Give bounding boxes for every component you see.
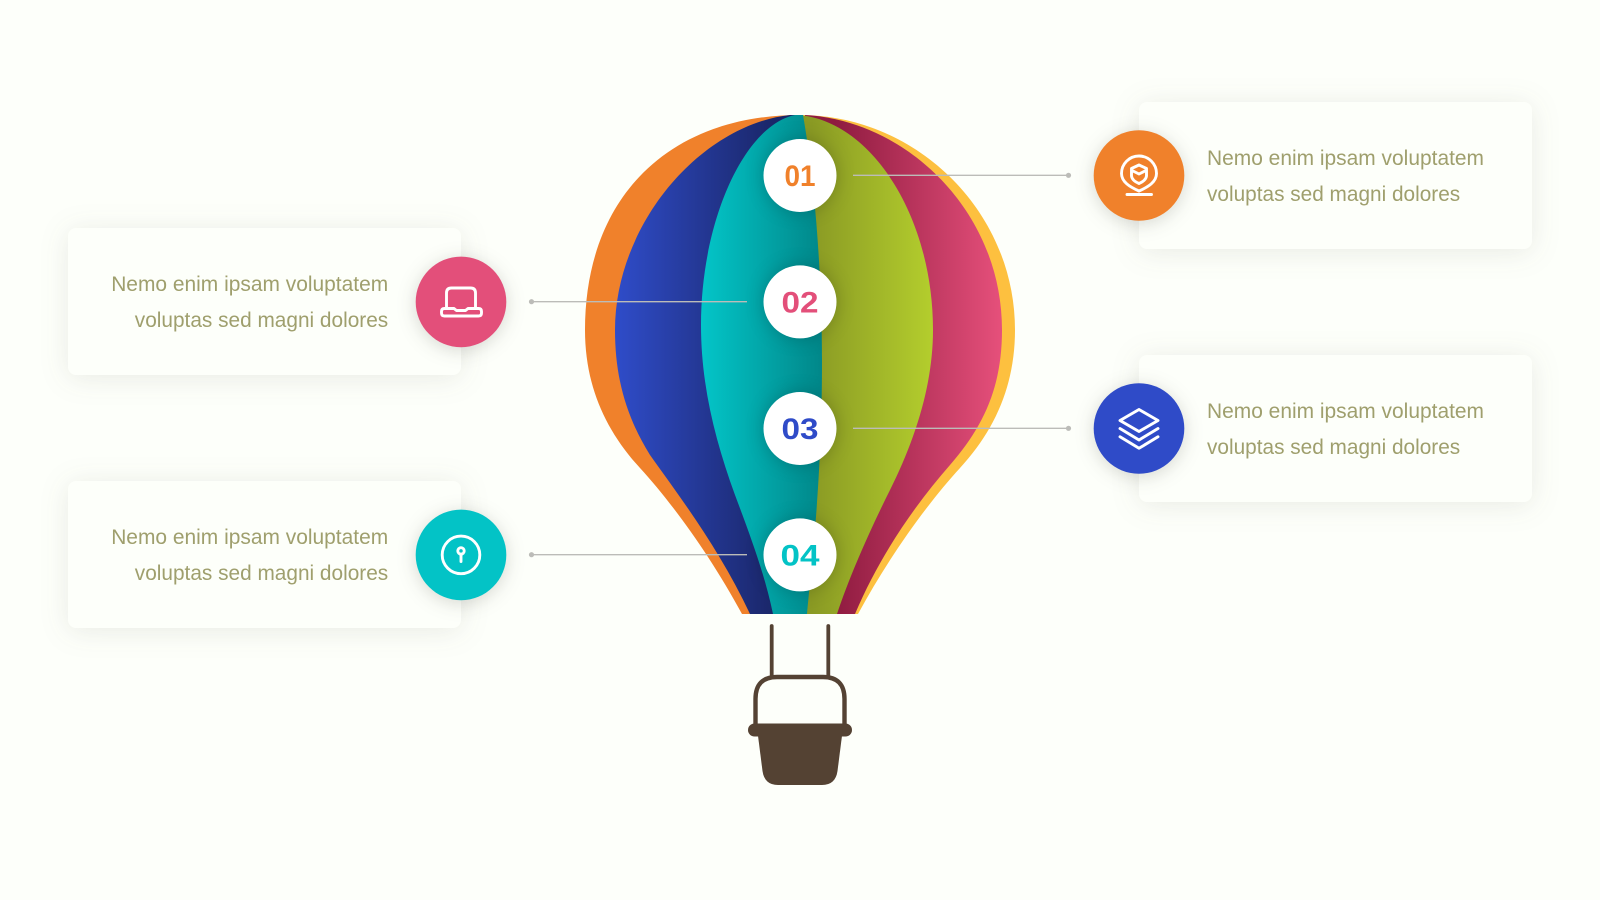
icon disc 04 (416, 510, 506, 600)
card 03 text: Nemo enim ipsam voluptatem (1207, 400, 1484, 423)
balloon panel: green (798, 115, 933, 614)
icon: layers (1120, 410, 1158, 448)
number badge 02: 02 (782, 286, 818, 319)
number badge 02 (764, 265, 836, 338)
number badge 03 (764, 392, 836, 465)
number badge 04 (764, 518, 836, 591)
panel: card 03 (1094, 355, 1532, 502)
card 03 text: voluptas sed magni dolores (1207, 436, 1460, 459)
basket frame (756, 677, 844, 726)
balloon panel: teal (701, 115, 822, 614)
card 02 text: Nemo enim ipsam voluptatem (111, 273, 388, 296)
connector line 02 (529, 299, 747, 304)
ropes (772, 626, 828, 677)
icon disc 02 (416, 257, 506, 347)
card 01 text: voluptas sed magni dolores (1207, 183, 1460, 206)
icon disc 03 (1094, 383, 1184, 474)
balloon basket (748, 626, 852, 785)
balloon panel: blue (615, 115, 800, 614)
basket body (756, 724, 844, 785)
number badge 01 (764, 139, 836, 212)
icon disc 01 (1094, 130, 1184, 221)
icon: location pin with shield (1122, 156, 1156, 194)
balloon envelope (585, 115, 1015, 614)
balloon panel: orange edge (585, 115, 800, 614)
panel: card 01 (1094, 102, 1532, 249)
card 01 text: Nemo enim ipsam voluptatem (1207, 147, 1484, 170)
icon: keyhole (442, 536, 480, 574)
number badge 01: 01 (784, 160, 816, 193)
panel: card 02 (68, 228, 506, 375)
connector line 04 (529, 552, 747, 557)
connector line 01 (853, 173, 1071, 178)
card 04 text: voluptas sed magni dolores (135, 562, 388, 585)
panel: card 04 (68, 481, 506, 628)
balloon panel: yellow edge (800, 115, 1015, 614)
basket rim (748, 724, 852, 736)
card 02 text: voluptas sed magni dolores (135, 309, 388, 332)
card 04 text: Nemo enim ipsam voluptatem (111, 526, 388, 549)
connector line 03 (853, 426, 1071, 431)
number badge 04: 04 (780, 539, 820, 572)
icon: laptop (442, 288, 482, 316)
number badge 03: 03 (782, 413, 818, 446)
balloon panel: pink (800, 115, 1002, 614)
